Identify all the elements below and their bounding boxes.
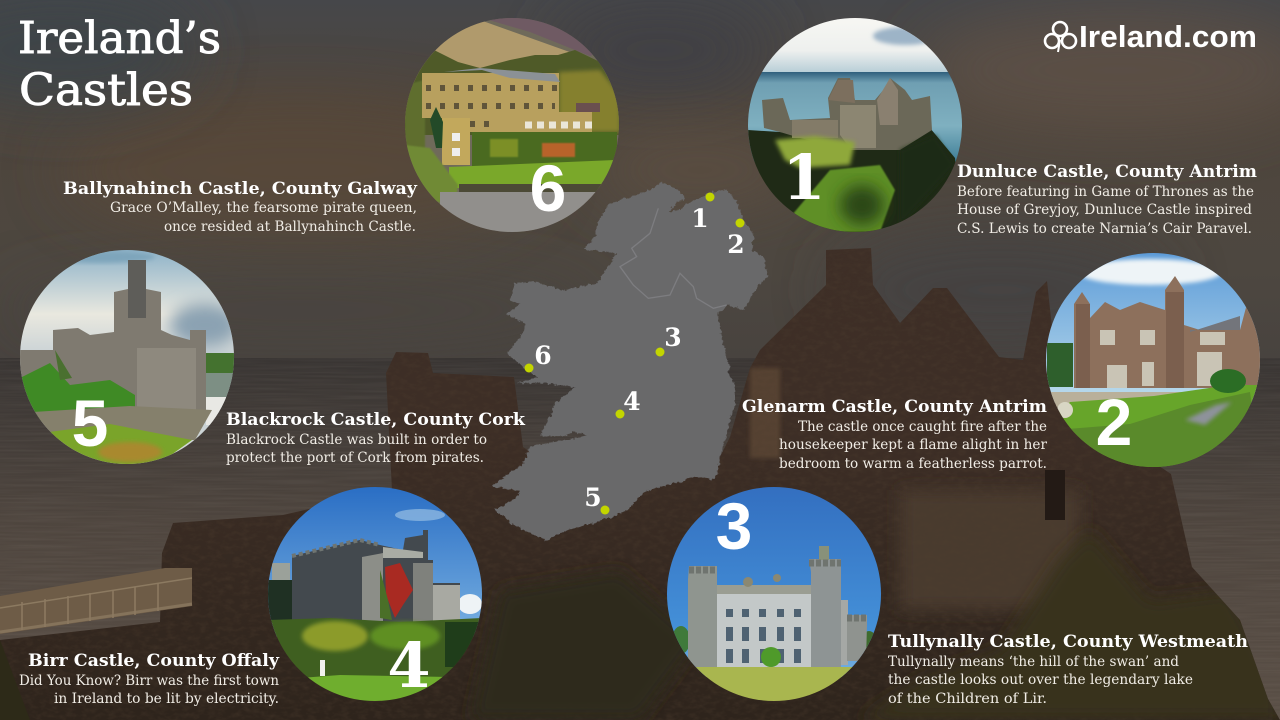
castle ruin silhouette — [0, 248, 1280, 720]
caption: Dunluce Castle: C.S. Lewis to create Narnia’s Cair Paravel. — [957, 221, 1252, 237]
panel 6: Ballynahinch Castle photo — [405, 18, 620, 234]
big number 2: 2 — [1096, 385, 1132, 459]
big number 6: 6 — [530, 151, 566, 225]
caption: Blackrock Castle: Blackrock Castle, County Cork — [226, 410, 526, 430]
title: Castles — [19, 65, 193, 116]
caption: Glenarm Castle: Glenarm Castle, County Antrim — [742, 397, 1047, 417]
panel 5: Blackrock Castle photo — [20, 250, 240, 470]
caption: Glenarm Castle — [742, 397, 1048, 472]
marker 3 — [656, 323, 682, 356]
caption: Birr Castle — [19, 651, 280, 707]
big number 5: 5 — [72, 386, 108, 460]
caption: Dunluce Castle: Before featuring in Game of Thrones as the — [957, 184, 1254, 200]
caption: Dunluce Castle: House of Greyjoy, Dunluce Castle inspired — [957, 202, 1252, 218]
marker 4: 4 — [623, 387, 641, 416]
wooden footbridge — [0, 568, 192, 634]
panel 1: Dunluce Castle photo — [748, 18, 962, 240]
marker 6 — [524, 341, 552, 372]
caption: Tullynally Castle — [888, 632, 1248, 707]
caption: Glenarm Castle: The castle once caught fire after the — [798, 419, 1047, 435]
panel 3: Tullynally Castle photo — [667, 487, 881, 703]
caption: Dunluce Castle — [957, 162, 1257, 237]
title: Ireland’s — [18, 13, 221, 64]
caption: Birr Castle: Birr Castle, County Offaly — [28, 651, 280, 671]
marker 5 — [584, 483, 610, 514]
map of Ireland — [492, 182, 767, 541]
big number 4: 4 — [387, 629, 431, 702]
caption: Blackrock Castle — [226, 410, 526, 466]
marker 1 — [691, 192, 714, 233]
panel 2: Glenarm Castle photo — [1046, 253, 1260, 470]
marker 4 — [616, 387, 641, 418]
caption: Ballynahinch Castle — [63, 179, 418, 235]
panel 4: Birr Castle photo — [268, 487, 482, 705]
caption: Birr Castle: Did You Know? Birr was the first town — [19, 673, 279, 689]
title — [18, 13, 221, 116]
caption: Tullynally Castle: Tullynally means ‘the hill of the swan’ and — [888, 654, 1179, 670]
marker 1: 1 — [691, 204, 709, 233]
caption: Glenarm Castle: bedroom to warm a featherless parrot. — [779, 456, 1047, 472]
marker 3: 3 — [664, 323, 682, 352]
logo: Ireland.com: Ireland.com — [1079, 19, 1257, 54]
caption: Ballynahinch Castle: Grace O’Malley, the fearsome pirate queen, — [110, 200, 417, 216]
caption: Glenarm Castle: housekeeper kept a flame alight in her — [779, 437, 1048, 453]
marker 5: 5 — [584, 483, 602, 512]
caption: Ballynahinch Castle: Ballynahinch Castle, County Galway — [63, 179, 418, 199]
caption: Dunluce Castle: Dunluce Castle, County Antrim — [957, 162, 1257, 182]
caption: Ballynahinch Castle: once resided at Ballynahinch Castle. — [164, 219, 416, 235]
caption: Tullynally Castle: of the Children of Lir. — [888, 691, 1047, 707]
caption: Blackrock Castle: Blackrock Castle was built in order to — [226, 432, 487, 448]
caption: Tullynally Castle: the castle looks out over the legendary lake — [888, 672, 1193, 688]
marker 6: 6 — [534, 341, 552, 370]
caption: Blackrock Castle: protect the port of Cork from pirates. — [226, 450, 484, 466]
icon: shamrock — [1045, 22, 1076, 52]
big number 1: 1 — [782, 141, 826, 214]
marker 2: 2 — [727, 230, 745, 259]
caption: Tullynally Castle: Tullynally Castle, County Westmeath — [888, 632, 1248, 652]
big number 3: 3 — [716, 489, 752, 563]
caption: Birr Castle: in Ireland to be lit by electricity. — [54, 691, 279, 707]
